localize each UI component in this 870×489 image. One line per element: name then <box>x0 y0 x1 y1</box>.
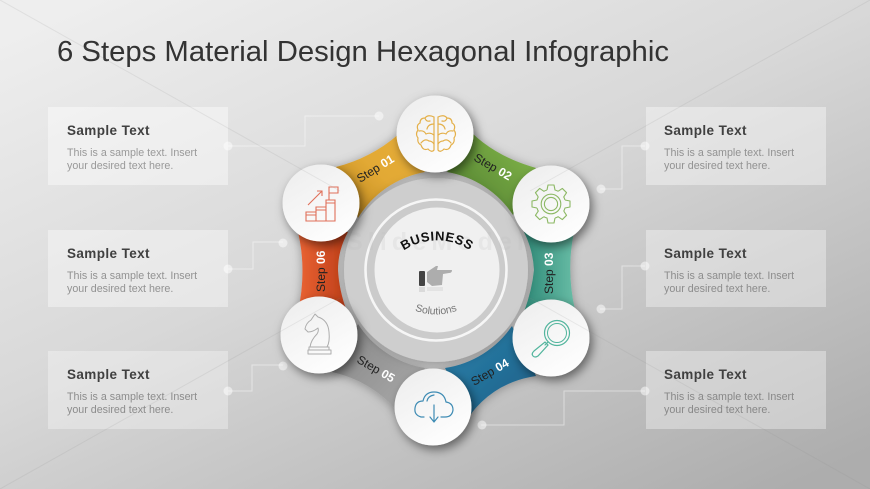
label: step 04: Step 04 <box>468 356 512 389</box>
icon: pointing hand <box>419 266 452 292</box>
icon: magnifier <box>532 320 570 357</box>
label: step 01: Step 01 <box>354 152 397 186</box>
panel: left text 3: your desired text here. <box>67 404 173 416</box>
center heading: BUSINESS <box>400 231 473 250</box>
panel: right text 2 <box>646 230 826 307</box>
ribbon: step 01 <box>336 133 425 218</box>
icon: cloud download <box>415 392 453 422</box>
panel: left text 1: your desired text here. <box>67 160 173 172</box>
circle: step 03 magnifier <box>512 300 590 376</box>
panel: left text 3 <box>48 351 228 429</box>
label: step 06: Step 06 <box>314 250 328 292</box>
circle: step 02 gear <box>512 166 590 242</box>
panel: right text 1 <box>646 107 826 185</box>
ribbon: step 04 <box>445 326 536 415</box>
panel: left text 1: This is a sample text. Insert <box>67 147 197 159</box>
panel: right text 3 <box>646 351 826 429</box>
circle: step 01 brain <box>396 96 474 172</box>
panel: right text 2: This is a sample text. Insert <box>664 270 794 282</box>
icon: stairs with flag <box>306 187 338 221</box>
hexagonal ribbon <box>298 133 575 415</box>
panel: right text 1: This is a sample text. Insert <box>664 147 794 159</box>
circle: step 04 cloud <box>394 368 472 446</box>
icon: brain <box>416 116 456 151</box>
ribbon: step 05 <box>332 324 425 415</box>
icon: chess knight <box>305 314 331 354</box>
label: step 05: Step 05 <box>354 352 398 385</box>
panel: left text 3: Sample Text <box>67 367 150 382</box>
title: 6 Steps Material Design Hexagonal Infographic <box>57 36 669 68</box>
icon: gear <box>532 185 570 223</box>
step labels <box>314 150 556 389</box>
panel: left text 1: Sample Text <box>67 123 150 138</box>
panel: left text 3: This is a sample text. Insert <box>67 391 197 403</box>
panel: right text 3: This is a sample text. Insert <box>664 391 794 403</box>
panel: left text 2 <box>48 230 228 307</box>
panel: right text 3: your desired text here. <box>664 404 770 416</box>
panel: right text 2: Sample Text <box>664 246 747 261</box>
center badge <box>339 174 532 368</box>
panel: left text 2: Sample Text <box>67 246 150 261</box>
ribbon: step 03 <box>524 232 575 312</box>
circle: step 06 stairs <box>282 164 360 242</box>
panel: left text 2: your desired text here. <box>67 283 173 295</box>
panel: left text 2: This is a sample text. Insert <box>67 270 197 282</box>
panel: left text 1 <box>48 107 228 185</box>
circle: step 05 knight <box>280 296 358 374</box>
panel: right text 1: your desired text here. <box>664 160 770 172</box>
ribbon: step 02 <box>447 133 536 215</box>
label: step 03: Step 03 <box>542 252 556 294</box>
panel: right text 2: your desired text here. <box>664 283 770 295</box>
center subheading: Solutions <box>416 304 456 314</box>
watermark: SlideModel <box>346 228 524 256</box>
label: step 02: Step 02 <box>472 150 515 183</box>
panel: right text 1: Sample Text <box>664 123 747 138</box>
ribbon: step 06 <box>298 232 348 312</box>
panel: right text 3: Sample Text <box>664 367 747 382</box>
connector lines <box>228 116 645 425</box>
